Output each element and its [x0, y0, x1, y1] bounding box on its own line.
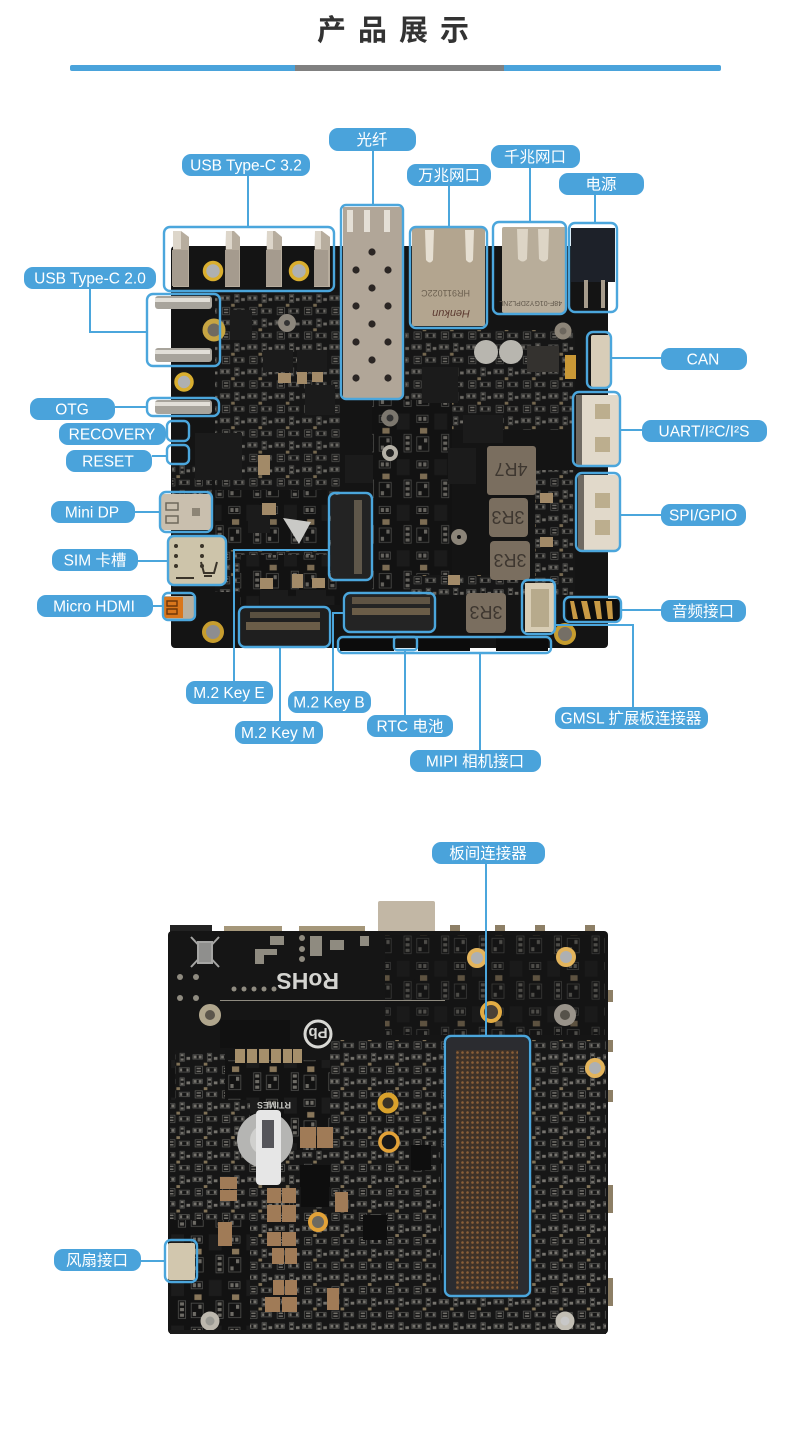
callout: audio: 音频接口 — [672, 602, 734, 620]
coin cell battery and label — [237, 1110, 293, 1185]
callout: M.2 Key B: M.2 Key B — [293, 694, 365, 712]
callout: Mini DP — [51, 492, 212, 532]
callout: 1G ethernet: 千兆网口 — [504, 148, 566, 166]
fiber cage — [343, 207, 402, 398]
callouts: bottom side — [54, 842, 545, 1296]
WEEE bin mark — [191, 937, 219, 967]
callout: fiber — [329, 128, 416, 399]
inductors: 3R3 — [469, 602, 503, 622]
callout: power: 电源 — [585, 176, 617, 194]
brand logo — [283, 518, 311, 544]
callout: RESET — [66, 445, 189, 472]
large chips — [195, 310, 503, 605]
RoHS mark: RoHS — [276, 968, 339, 994]
callout: USB Type-C 3.2 — [164, 154, 334, 291]
audio jack contacts — [567, 599, 620, 621]
USB-C 3.2 vertical connectors — [172, 231, 330, 287]
inductors — [466, 446, 536, 633]
pads row, top of rear — [177, 935, 445, 1001]
copper capacitors — [258, 372, 553, 589]
callout: 1G ethernet — [491, 145, 580, 314]
callout: OTG — [30, 398, 219, 420]
callout: USB Type-C 2.0 — [24, 267, 220, 366]
callout: M.2 Key E — [186, 493, 372, 704]
callout: CAN: CAN — [687, 352, 719, 368]
white wire connectors — [525, 335, 619, 632]
title: 产品展示 — [317, 14, 481, 47]
RTIMES marking: RTIMES — [257, 1100, 291, 1110]
callout: CAN — [587, 332, 747, 388]
callout: SPI/GPIO — [576, 473, 746, 551]
capacitors and choke — [474, 340, 576, 379]
10G ethernet jack: HR911022C — [421, 288, 470, 298]
corner bottom edge — [170, 1330, 606, 1334]
callout: 10G ethernet: 万兆网口 — [418, 166, 480, 184]
Mini DP port — [161, 494, 211, 530]
callout: board-to-board connector — [432, 842, 545, 1296]
callout: RESET: RESET — [82, 454, 134, 470]
callout: GMSL: GMSL 扩展板连接器 — [561, 710, 702, 728]
board photo: bottom side — [168, 901, 613, 1334]
callout: fiber: 光纤 — [356, 131, 388, 149]
dark inductors, rear — [300, 1145, 431, 1240]
callout: M.2 Key E: M.2 Key E — [193, 685, 265, 702]
callout: MIPI camera — [338, 637, 551, 772]
callout: 10G ethernet — [407, 164, 491, 328]
copper capacitor row — [235, 1049, 302, 1063]
callout: M.2 Key M — [235, 607, 330, 744]
callout: USB Type-C 3.2: USB Type-C 3.2 — [190, 158, 302, 174]
brown capacitors — [218, 1127, 348, 1312]
callout: board-to-board connector: 板间连接器 — [449, 844, 527, 862]
inductors: 4R7 — [494, 459, 528, 479]
1G ethernet jack: 48F-01GY2DPL2NL — [499, 299, 562, 306]
Pb-free mark — [305, 1021, 331, 1047]
title underline bar — [70, 65, 721, 71]
callout: M.2 Key B — [288, 593, 435, 713]
power connector — [571, 228, 615, 308]
callout: UART/I2C/I2S: UART/I²C/I²S — [658, 424, 750, 440]
Micro HDMI port — [164, 596, 194, 619]
callout: fan connector: 风扇接口 — [66, 1252, 128, 1270]
callout: Micro HDMI: Micro HDMI — [53, 598, 135, 616]
callout: UART/I2C/I2S — [573, 392, 767, 466]
10G ethernet jack — [412, 228, 485, 326]
board photo: top side — [155, 207, 620, 652]
10G ethernet jack: Henkun — [432, 307, 470, 319]
MIPI connectors — [340, 638, 548, 652]
callout: RECOVERY: RECOVERY — [69, 426, 155, 444]
callouts: top side — [24, 128, 767, 772]
callout: SIM — [52, 536, 226, 585]
USB-C horizontal connectors — [155, 296, 212, 414]
callout: OTG: OTG — [55, 402, 89, 418]
callout: power — [559, 173, 644, 312]
callout: audio — [564, 597, 746, 622]
Pb-free mark: Pb — [308, 1024, 328, 1041]
dark bare area — [220, 1020, 290, 1048]
callout: RTC battery — [367, 637, 453, 737]
mounting holes — [176, 262, 574, 643]
callout: RECOVERY — [59, 421, 189, 445]
callout: Mini DP: Mini DP — [65, 504, 119, 522]
callout: Micro HDMI — [37, 593, 195, 620]
callout: SPI/GPIO: SPI/GPIO — [669, 508, 737, 524]
callout: GMSL — [522, 580, 708, 729]
mounting holes, rear — [202, 949, 603, 1328]
callout: fan connector — [54, 1240, 197, 1282]
callout: RTC battery: RTC 电池 — [377, 718, 443, 736]
SIM card slot — [169, 537, 225, 584]
fan connector — [168, 1243, 195, 1280]
callout: MIPI camera: MIPI 相机接口 — [426, 752, 524, 770]
inductors: 3R3 — [491, 507, 525, 527]
inductors: 3R3 — [493, 550, 527, 570]
1G ethernet jack — [499, 227, 566, 313]
callout: SIM: SIM 卡槽 — [64, 552, 126, 570]
callout: M.2 Key M: M.2 Key M — [241, 725, 315, 742]
M.2 connectors — [241, 495, 434, 646]
callout: USB Type-C 2.0: USB Type-C 2.0 — [34, 270, 146, 288]
board-to-board connector — [447, 1038, 528, 1295]
